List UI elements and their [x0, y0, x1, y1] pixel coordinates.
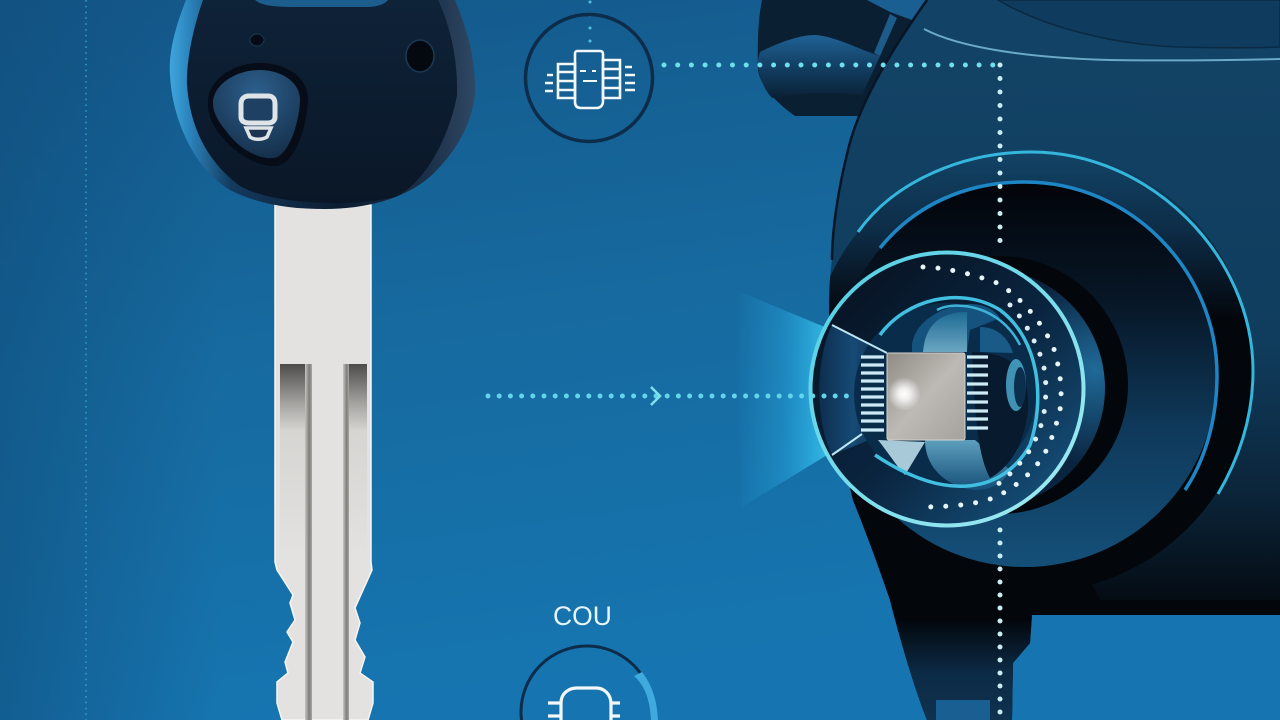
black ring — [988, 256, 1128, 514]
fob LED hole — [250, 34, 264, 46]
wedge lines — [832, 325, 887, 455]
key blade — [275, 205, 373, 720]
badge ring — [526, 14, 652, 142]
chip pins — [861, 357, 988, 430]
mounting bracket — [758, 0, 927, 116]
fob top button — [255, 0, 388, 7]
badge ring — [521, 646, 653, 720]
fob inner face — [187, 0, 457, 203]
lens left wedge — [819, 325, 887, 455]
dotted arrow to chip — [488, 387, 852, 405]
bottom chip badge — [521, 646, 658, 720]
lens inner arc — [875, 298, 1038, 486]
housing left edge — [832, 0, 927, 260]
fob keyring hole — [406, 40, 434, 72]
badge accent arc — [634, 672, 658, 720]
blade grooves — [280, 364, 367, 720]
fob button with lock icon — [208, 63, 308, 166]
black lower body — [853, 480, 1280, 720]
chip highlight — [887, 377, 921, 411]
microchip — [887, 353, 965, 440]
bracket blue strip — [867, 0, 927, 20]
socket disc — [833, 183, 1217, 567]
inner dots arc — [997, 305, 1046, 485]
dotted connector: chip to ignition — [664, 62, 1000, 68]
chip icon — [545, 51, 635, 108]
chip icon — [548, 688, 620, 720]
bracket wave highlight — [758, 35, 880, 98]
outer dots arc — [923, 267, 1061, 507]
outer bezel — [829, 182, 1252, 584]
housing body — [829, 0, 1280, 720]
blue socket ring — [880, 182, 1217, 490]
lock icon — [241, 96, 275, 139]
faint dotted guide line on left — [85, 0, 87, 720]
car key — [170, 0, 475, 720]
dotted line into top chip circle — [588, 2, 592, 44]
key fob — [170, 0, 475, 209]
dotted vertical connector upper — [998, 65, 1002, 250]
magnified lens — [809, 251, 1085, 527]
blue bevel ring — [1026, 275, 1105, 498]
outer cyan ring — [858, 152, 1253, 494]
dotted vertical connector lower — [998, 530, 1002, 720]
lens second arc — [937, 306, 1020, 345]
inner mechanism — [854, 303, 1036, 490]
light cone — [733, 289, 832, 507]
label: COU: COU — [553, 601, 612, 631]
ignition housing — [758, 0, 1280, 720]
lens body — [809, 251, 1085, 527]
highlight contour line — [924, 29, 1280, 60]
lower blue notch — [936, 700, 990, 720]
top chip badge — [526, 14, 652, 142]
bracket diagonal strip — [874, 14, 897, 56]
lens outer ring — [810, 252, 1084, 526]
socket assembly clipped to housing — [809, 149, 1253, 593]
top right panel seam — [998, 0, 1280, 48]
